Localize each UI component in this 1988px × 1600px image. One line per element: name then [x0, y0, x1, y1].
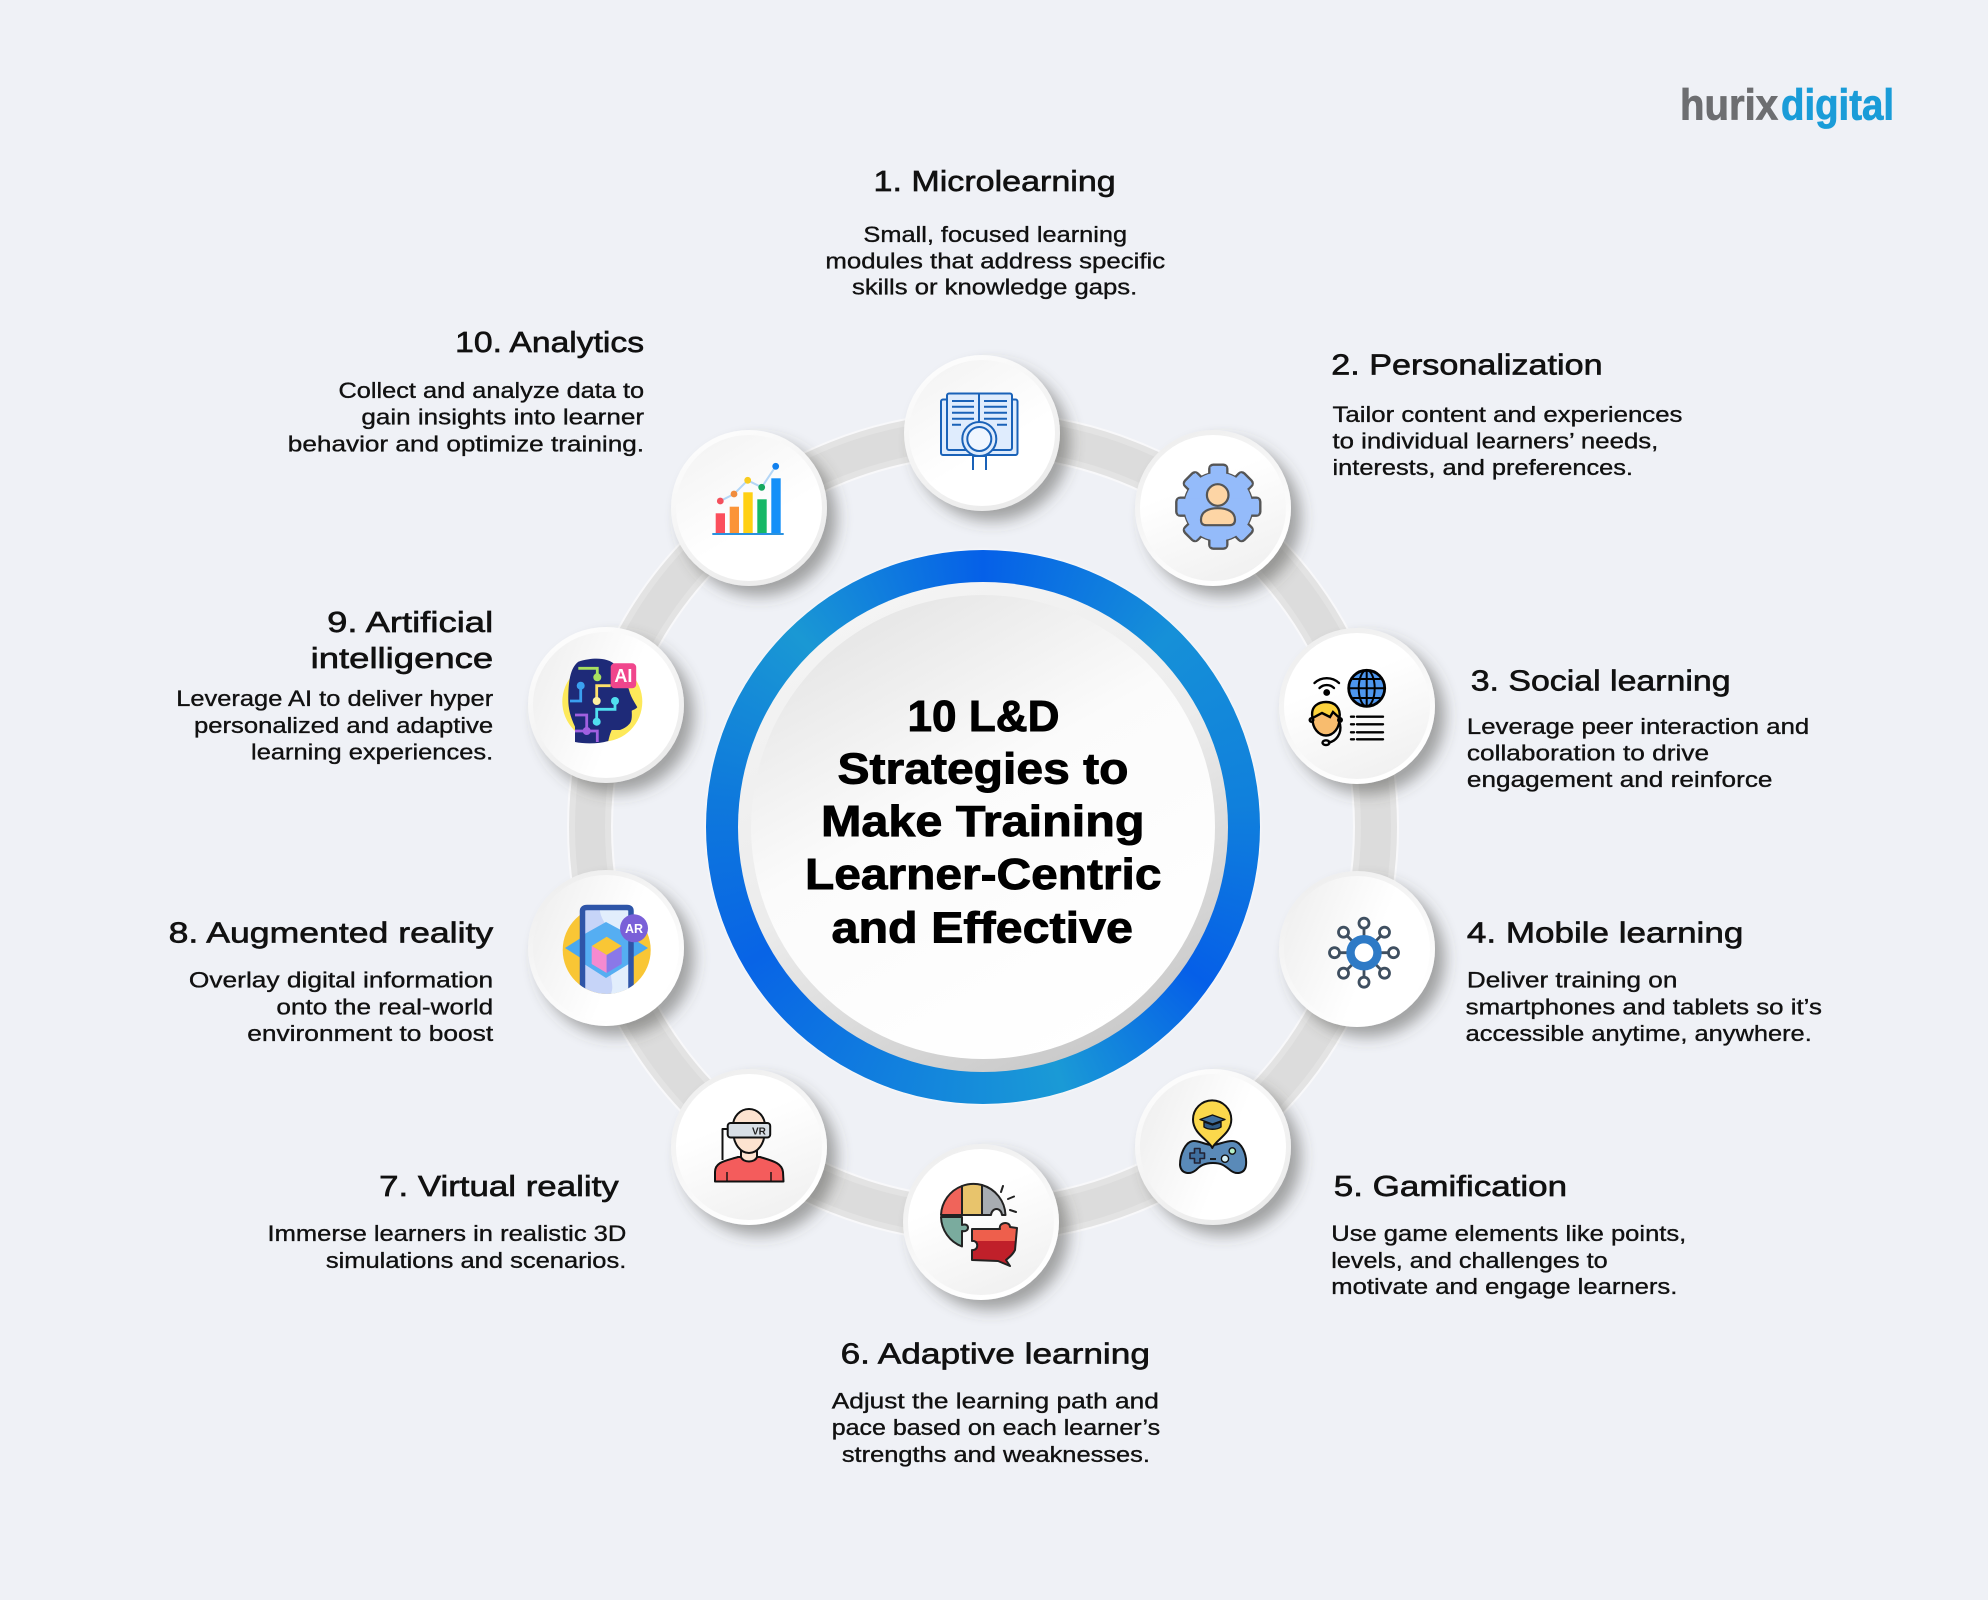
- node 5: gamification icon: [1135, 1069, 1291, 1225]
- node 1: book icon: [904, 355, 1060, 511]
- text: 5. Gamification: 5. Gamification: [1334, 1171, 1567, 1203]
- text: 8. Augmented reality: [169, 918, 494, 1046]
- text: 1. Microlearning: modules that address specific: [825, 248, 1165, 273]
- node 9: artificial intelligence icon: AI: [614, 666, 632, 686]
- text: 7. Virtual reality: 7. Virtual reality: [379, 1171, 619, 1203]
- title: Make Training: [821, 797, 1144, 846]
- text: 6. Adaptive learning: pace based on each learner’s: [832, 1415, 1160, 1440]
- text: 4. Mobile learning: [1466, 918, 1822, 1046]
- title: 10 L&D: [908, 692, 1060, 741]
- center disc with title: [738, 582, 1228, 1072]
- node 8: augmented reality icon: [528, 870, 684, 1026]
- text: 1. Microlearning: [825, 166, 1165, 300]
- title: [805, 692, 1162, 952]
- text: 9. Artificial intelligence: intelligence: [311, 643, 493, 675]
- text: 10. Analytics: Collect and analyze data to: [339, 378, 644, 403]
- text: 5. Gamification: motivate and engage learners.: [1331, 1274, 1677, 1299]
- text: 4. Mobile learning: 4. Mobile learning: [1467, 918, 1743, 950]
- text: 9. Artificial intelligence: personalized and adaptive: [194, 713, 493, 738]
- text: 1. Microlearning: skills or knowledge gaps.: [852, 275, 1137, 300]
- text: 8. Augmented reality: environment to boost: [247, 1021, 494, 1046]
- text: 8. Augmented reality: 8. Augmented reality: [169, 918, 494, 950]
- text: 2. Personalization: to individual learners’ needs,: [1333, 429, 1658, 454]
- text: 10. Analytics: 10. Analytics: [455, 327, 644, 359]
- logo: digital: [1781, 80, 1894, 130]
- node 2: gear person icon: [1135, 430, 1291, 586]
- title: and Effective: [832, 904, 1133, 952]
- text: 3. Social learning: [1467, 665, 1809, 792]
- text: 3. Social learning: engagement and reinforce: [1467, 767, 1772, 792]
- text: 10. Analytics: gain insights into learner: [361, 405, 645, 430]
- text: 4. Mobile learning: smartphones and tablets so it’s: [1466, 994, 1822, 1019]
- title: Learner-Centric: [805, 850, 1162, 899]
- text: 9. Artificial intelligence: learning experiences.: [251, 739, 493, 764]
- text: 5. Gamification: Use game elements like points,: [1331, 1221, 1686, 1246]
- node 8: augmented reality icon: AR: [625, 922, 643, 936]
- text: 3. Social learning: collaboration to drive: [1467, 741, 1709, 766]
- text: 4. Mobile learning: accessible anytime, anywhere.: [1466, 1021, 1812, 1046]
- text: 6. Adaptive learning: 6. Adaptive learning: [841, 1339, 1150, 1371]
- text: 8. Augmented reality: onto the real-world: [276, 994, 493, 1019]
- text: 9. Artificial intelligence: Leverage AI to deliver hyper: [176, 686, 494, 711]
- text: 5. Gamification: [1331, 1171, 1686, 1299]
- text: 7. Virtual reality: simulations and scenarios.: [326, 1248, 626, 1273]
- text: 7. Virtual reality: [268, 1171, 626, 1273]
- text: 8. Augmented reality: Overlay digital information: [189, 968, 493, 993]
- circular track: [590, 434, 1376, 1220]
- text: 2. Personalization: Tailor content and experiences: [1333, 402, 1682, 427]
- logo: [1680, 80, 1894, 130]
- text: 6. Adaptive learning: Adjust the learning path and: [832, 1389, 1159, 1414]
- text: 10. Analytics: behavior and optimize training.: [288, 431, 644, 456]
- title: Strategies to: [838, 744, 1128, 794]
- text: 4. Mobile learning: Deliver training on: [1467, 968, 1677, 993]
- node 3: social learning icon: [1279, 628, 1435, 784]
- node 6: adaptive learning puzzle icon: [903, 1144, 1059, 1300]
- blue gradient ring: [706, 550, 1260, 1104]
- text: 1. Microlearning: 1. Microlearning: [874, 166, 1116, 198]
- text: 9. Artificial intelligence: [176, 607, 494, 764]
- node 4: mobile learning network icon: [1279, 871, 1435, 1027]
- text: 6. Adaptive learning: strengths and weaknesses.: [842, 1442, 1150, 1467]
- text: 5. Gamification: levels, and challenges to: [1331, 1248, 1608, 1273]
- text: 2. Personalization: interests, and preferences.: [1333, 455, 1633, 480]
- text: 2. Personalization: 2. Personalization: [1331, 350, 1603, 382]
- text labels group: [169, 166, 1822, 1467]
- text: 3. Social learning: Leverage peer interaction and: [1467, 714, 1809, 739]
- text: 10. Analytics: [288, 327, 645, 456]
- node 10: analytics icon: [671, 430, 827, 586]
- text: 6. Adaptive learning: [832, 1339, 1160, 1467]
- node 7: virtual reality icon: VR: [752, 1126, 767, 1138]
- node 9: artificial intelligence icon: [528, 627, 684, 783]
- node 7: virtual reality icon: [671, 1069, 827, 1225]
- logo: hurix: [1680, 80, 1778, 130]
- text: 2. Personalization: [1331, 350, 1682, 480]
- text: 1. Microlearning: Small, focused learning: [863, 222, 1127, 247]
- text: 9. Artificial intelligence: 9. Artificial: [327, 607, 493, 639]
- text: 3. Social learning: 3. Social learning: [1471, 665, 1731, 697]
- text: 7. Virtual reality: Immerse learners in realistic 3D: [268, 1221, 626, 1246]
